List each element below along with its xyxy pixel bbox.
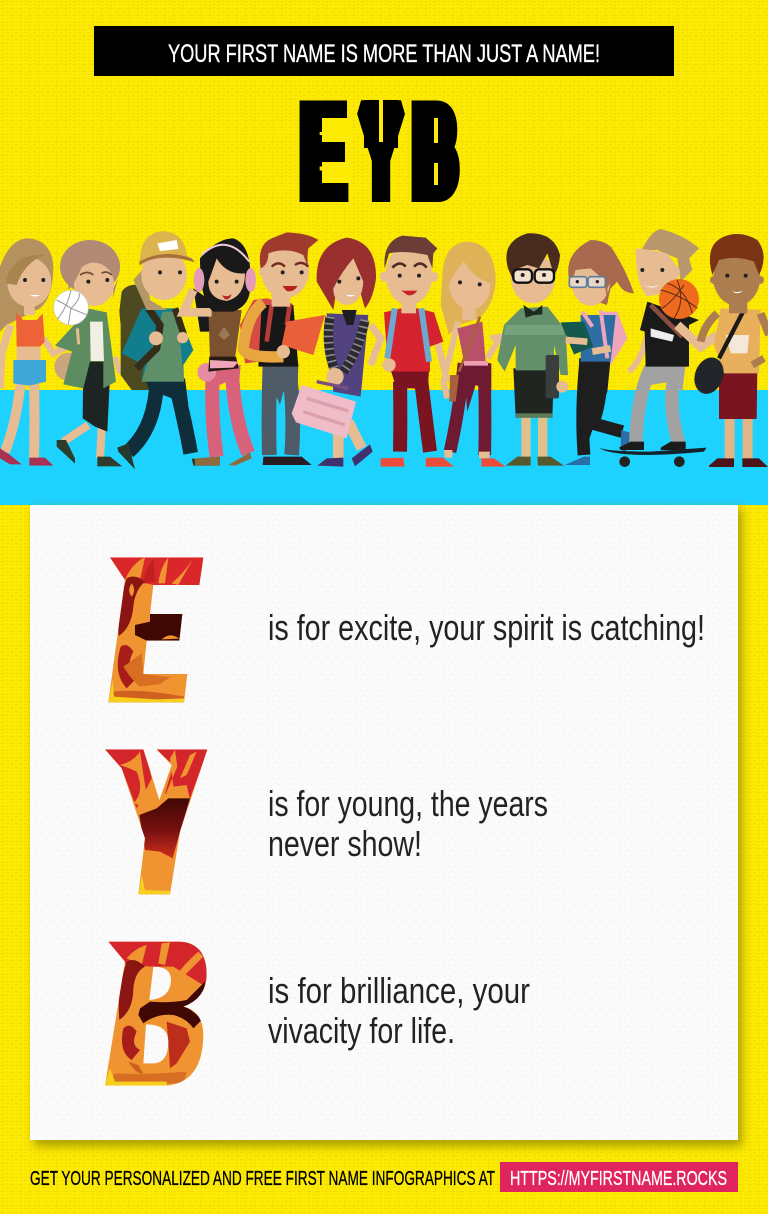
footer URL badge (500, 1162, 738, 1192)
person: hiker with backpack and cap (117, 231, 220, 469)
illustration: group of people, right half (371, 229, 768, 467)
description: Y: never show! (268, 823, 422, 864)
illustration: group of people, left half (0, 231, 376, 469)
name heading (300, 83, 458, 219)
basketball (659, 279, 699, 319)
person: girl with tablet (561, 240, 634, 465)
person: skateboarder with basketball (599, 229, 717, 467)
title banner (94, 26, 674, 76)
person: girl with volleyball (54, 240, 122, 466)
description: B: is for brilliance, your (268, 970, 530, 1011)
flame letter Y (103, 748, 210, 895)
person: boy with glasses (497, 233, 568, 466)
description: Y (268, 783, 548, 864)
person: boy with red shirt (371, 236, 454, 467)
person: girl with pink bag (292, 238, 376, 467)
pink handbag (292, 382, 356, 438)
name heading: Y (360, 83, 402, 219)
blue floor band (0, 390, 768, 505)
description: B: vivacity for life. (268, 1010, 455, 1051)
flame letter B (103, 940, 208, 1087)
person: girl in orange top (0, 238, 77, 466)
person: boy in yellow tank (689, 234, 768, 467)
footer call to action: GET YOUR PERSONALIZED AND FREE FIRST NAME INFOGRAPHICS AT (30, 1168, 495, 1190)
person: boy with book (240, 232, 325, 465)
panel: white card (30, 505, 742, 1146)
volleyball (54, 290, 88, 325)
description: Y: is for young, the years (268, 783, 548, 824)
title banner: YOUR FIRST NAME IS MORE THAN JUST A NAME! (168, 40, 600, 68)
description: B (268, 970, 530, 1051)
person: blond girl (426, 242, 506, 467)
name heading: B (412, 83, 458, 219)
flame letter E (107, 557, 207, 703)
person: girl with headphones (183, 238, 256, 466)
name heading: E (300, 83, 346, 219)
